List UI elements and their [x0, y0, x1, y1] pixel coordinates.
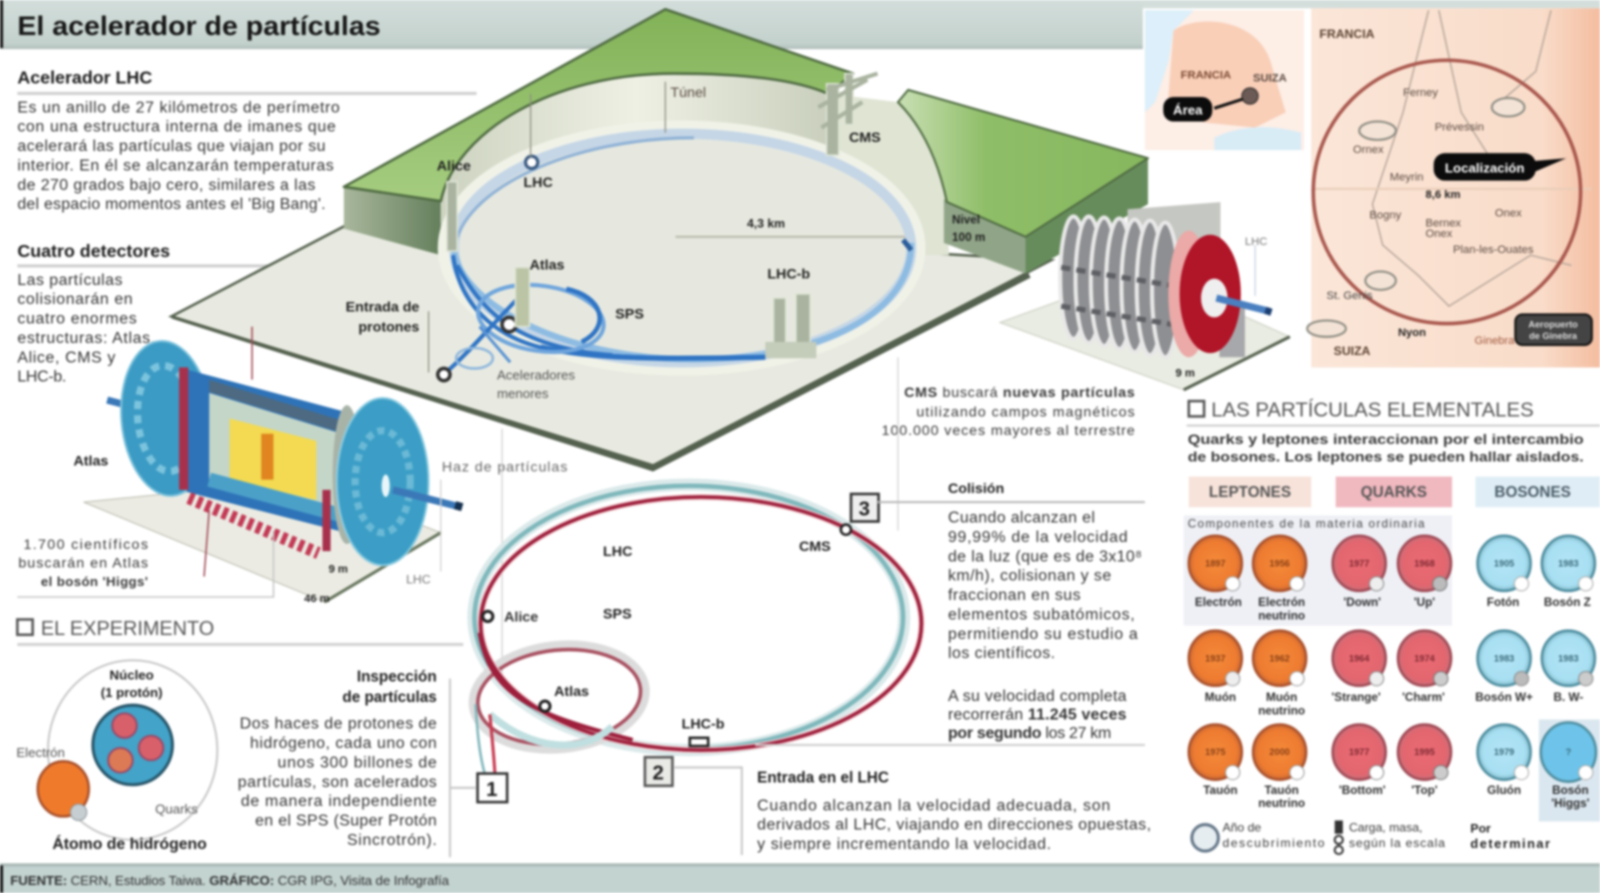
legend: discovery year: descubrimiento	[1222, 836, 1325, 850]
step marker 1	[478, 774, 507, 802]
particle: W+ boson: 1983	[1494, 653, 1514, 663]
Atlas detector labels: buscarán en Atlas	[18, 555, 148, 571]
text: particle inspection: Sincrotrón).	[347, 832, 437, 849]
particle: muon: Muón	[1205, 691, 1236, 704]
text: collision: de la luz (que es de 3x10⁸	[948, 548, 1142, 565]
header band	[0, 0, 1600, 49]
particle: gluon: Gluón	[1487, 784, 1521, 797]
panel: accelerator text	[17, 68, 477, 213]
illustration: CMS detector: 9 m	[1176, 368, 1195, 380]
slab labels: LHC-b	[767, 267, 810, 283]
heading: elementary particles: LAS PARTÍCULAS ELEMENTALES	[1211, 398, 1534, 421]
map: locator area: Ferney	[1403, 87, 1438, 99]
ring: LHC tunnel	[454, 134, 911, 362]
Atlas detector labels: Atlas	[73, 453, 108, 469]
slab labels: Alice	[437, 158, 471, 174]
particle: tau neutrino: Tauón	[1264, 784, 1299, 797]
legend: charge and spin	[1335, 820, 1445, 854]
step marker 2: 2	[652, 763, 664, 785]
particle: W- boson: B. W-	[1554, 691, 1583, 704]
panel: accelerator text: del espacio momentos antes el 'Big Bang'.	[17, 196, 326, 213]
text: collision	[755, 481, 1145, 746]
particle: muon neutrino	[1253, 631, 1306, 717]
text: entry into LHC	[674, 767, 1151, 855]
footer band	[0, 863, 1600, 893]
slab labels: LHC	[523, 175, 553, 191]
diagram: hydrogen atom: Núcleo	[110, 668, 154, 683]
particle: gluon: 1979	[1494, 747, 1514, 757]
text: particle inspection: de partículas	[342, 689, 437, 706]
slab labels: 4,3 km	[747, 217, 785, 231]
collision diagram labels	[504, 539, 831, 733]
text: particles intro	[1188, 432, 1584, 465]
panel: detectors text: Las partículas	[17, 272, 122, 289]
map: locator area: de Ginebra	[1529, 331, 1578, 341]
text: collision: recorrerán 11.245 veces	[948, 706, 1127, 723]
particle: Z boson	[1542, 536, 1595, 609]
category: leptones: LEPTONES	[1209, 484, 1291, 501]
text: CMS note: utilizando campos magnéticos	[916, 404, 1135, 420]
step marker 2	[645, 757, 672, 786]
map: locator area: 8,6 km	[1426, 189, 1460, 201]
panel: detectors text: LHC-b.	[17, 369, 66, 386]
map: Europe inset: FRANCIA	[1181, 70, 1231, 82]
particle: strange: 1964	[1349, 653, 1370, 663]
panel: accelerator text: Es un anillo de 27 kilómetros de perímetro	[17, 99, 340, 116]
text: collision: elementos subatómicos,	[948, 606, 1135, 623]
panel: accelerator text: interior. En él se alcanzarán temperaturas	[17, 157, 334, 174]
text: CMS note	[882, 357, 1135, 531]
text: collision: Cuando alcanzan el	[948, 510, 1095, 527]
particle: photon	[1478, 536, 1531, 609]
panel: detectors text	[17, 241, 507, 386]
panel: accelerator text: con una estructura interna de imanes que	[17, 119, 336, 136]
particle: Higgs boson: ?	[1566, 747, 1572, 757]
particle: gluon	[1478, 725, 1531, 797]
particle: strange	[1332, 631, 1386, 704]
category: quarks	[1336, 477, 1452, 507]
slab labels	[346, 85, 985, 401]
collision diagram labels: LHC	[603, 544, 632, 560]
text: particles intro: de bosones. Los leptones se pueden hallar aislados.	[1188, 449, 1584, 465]
particle: down: 1977	[1349, 558, 1369, 568]
particle: muon	[1189, 631, 1242, 704]
text: collision: los científicos.	[948, 645, 1055, 662]
particle: W+ boson	[1475, 631, 1533, 704]
map: locator area: SUIZA	[1334, 344, 1371, 358]
category: quarks: QUARKS	[1361, 484, 1427, 501]
Atlas detector labels: 1.700 científicos	[23, 537, 148, 553]
collision diagram labels: Alice	[504, 610, 538, 626]
detector shafts	[447, 74, 878, 358]
map: locator area: Onex	[1426, 228, 1453, 240]
particle: down	[1333, 536, 1386, 609]
panel: detectors text: estructuras: Atlas,	[17, 330, 155, 347]
particle: electron neutrino	[1253, 536, 1306, 622]
particle: Higgs boson	[1539, 719, 1600, 822]
map: Europe inset: Área	[1173, 102, 1203, 117]
category: bosones: BOSONES	[1494, 484, 1571, 501]
text: collision: A su velocidad completa	[948, 688, 1127, 705]
slab labels: Atlas	[530, 257, 565, 273]
slab labels: Nivel	[952, 214, 980, 227]
text: particle inspection: Dos haces de protones de	[240, 716, 437, 733]
particle: tau neutrino: 2000	[1269, 747, 1290, 757]
map: locator area: Meyrin	[1390, 172, 1423, 184]
map: locator area	[1307, 8, 1600, 367]
text: entry into LHC: derivados al LHC, viajando en direcciones opuestas,	[757, 817, 1151, 834]
text: particle inspection: de manera independiente	[241, 793, 437, 810]
particle: tau neutrino	[1253, 725, 1306, 810]
particle: up: 'Up'	[1414, 596, 1435, 609]
heading: experiment	[17, 618, 463, 646]
step marker 3: 3	[859, 498, 870, 520]
slab labels: SPS	[615, 306, 644, 322]
particle: top: 1995	[1414, 747, 1435, 757]
particle: up: 1968	[1414, 558, 1435, 568]
text: entry into LHC: Cuando alcanzan la velocidad adecuada, son	[757, 797, 1110, 814]
particle: charm: 'Charm'	[1402, 691, 1445, 704]
step marker 3	[851, 494, 879, 522]
collision diagram labels: Atlas	[554, 684, 589, 700]
collision diagram labels: SPS	[603, 606, 632, 622]
category: bosones	[1476, 477, 1600, 507]
panel: accelerator text: acelerará las partículas que viajan por su	[17, 138, 326, 155]
Atlas detector labels	[17, 429, 567, 674]
collision diagram labels: CMS	[799, 539, 831, 555]
map: locator area: Plan-les-Ouates	[1453, 244, 1534, 256]
particle: Z boson: Bosón Z	[1544, 596, 1591, 609]
text: entry into LHC: Entrada en el LHC	[757, 770, 889, 787]
particle: photon: 1905	[1494, 558, 1514, 568]
collision diagram labels: LHC-b	[682, 717, 725, 733]
diagram: hydrogen atom: Electrón	[16, 745, 65, 760]
map: locator area: Aeropuerto	[1528, 320, 1578, 330]
title: El acelerador de partículas	[17, 11, 381, 41]
slab labels: Entrada de	[346, 299, 419, 315]
particle: charm	[1398, 631, 1451, 704]
diagram: hydrogen atom	[16, 660, 217, 853]
particle: photon: Fotón	[1487, 596, 1519, 609]
note: ordinary matter: Componentes de la materia ordinaria	[1188, 518, 1425, 531]
particle: electron: Electrón	[1195, 596, 1242, 609]
footer band: FUENTE: CERN, Estudios Taiwa. GRÁFICO: CGR IPG, Visita de Infografía	[10, 873, 450, 888]
category: leptones	[1189, 477, 1311, 507]
particle: W- boson: 1983	[1558, 653, 1579, 663]
ordinary matter background	[1184, 515, 1452, 626]
text: collision: km/h), colisionan y se	[948, 568, 1111, 585]
diagram: hydrogen atom: Átomo de hidrógeno	[52, 834, 207, 853]
map: locator area: Localización	[1445, 161, 1524, 176]
map: locator area: Prévessin	[1435, 122, 1484, 134]
Atlas detector labels: el bosón 'Higgs'	[41, 574, 148, 589]
particle: top	[1398, 725, 1451, 797]
underground slab illustration	[171, 9, 1148, 472]
particle: electron neutrino: Electrón	[1258, 596, 1305, 609]
Atlas detector labels: LHC	[406, 573, 431, 587]
particle: strange: 'Strange'	[1332, 691, 1381, 704]
particle: electron	[1189, 536, 1242, 609]
particle: bottom: 1977	[1349, 747, 1369, 757]
map: locator area: Onex	[1495, 207, 1522, 219]
text: particle inspection	[238, 669, 476, 857]
map: locator area: Bernex	[1426, 218, 1461, 230]
text: collision: Colisión	[948, 481, 1004, 497]
panel: detectors text: Alice, CMS y	[17, 349, 115, 366]
particle: down: 'Down'	[1344, 596, 1381, 609]
legend: discovery year: Año de	[1222, 821, 1261, 835]
particle: W+ boson: Bosón W+	[1475, 691, 1533, 704]
heading: experiment: EL EXPERIMENTO	[41, 618, 214, 640]
map: locator area: Nyon	[1398, 327, 1426, 339]
map: locator area: Ginebra	[1474, 335, 1515, 347]
diagram: hydrogen atom: Quarks	[155, 801, 198, 816]
particle: bottom	[1333, 725, 1386, 797]
text: particle inspection: Inspección	[357, 669, 437, 686]
text: collision: permitiendo su estudio a	[948, 626, 1138, 643]
legend: undetermined: Por	[1470, 822, 1491, 836]
text: entry into LHC: y siempre incrementando la velocidad.	[757, 836, 1051, 853]
legend: undetermined	[1470, 822, 1550, 851]
particle: electron neutrino: 1956	[1269, 558, 1290, 568]
panel: accelerator text: Acelerador LHC	[17, 68, 152, 88]
particle: Z boson: 1983	[1558, 558, 1579, 568]
text: collision: 99,99% de la velocidad	[948, 529, 1128, 546]
Atlas detector labels: Haz de partículas	[442, 459, 567, 475]
slab labels: CMS	[849, 130, 881, 146]
legend: charge and spin: Carga, masa,	[1349, 821, 1422, 835]
particle: muon neutrino: Muón	[1266, 691, 1297, 704]
particle: tau: Tauón	[1203, 784, 1238, 797]
text: collision: fraccionan en sus	[948, 587, 1081, 604]
map: locator area: FRANCIA	[1319, 27, 1375, 41]
particle: top: 'Top'	[1411, 784, 1438, 797]
illustration: Atlas detector	[84, 327, 462, 602]
panel: detectors text: colisionarán en	[17, 291, 133, 308]
particle: Higgs boson: 'Higgs'	[1551, 797, 1590, 810]
particle: tau	[1189, 725, 1242, 797]
heading: elementary particles	[1187, 398, 1600, 427]
slab labels: protones	[358, 320, 419, 336]
slab labels: menores	[497, 386, 549, 401]
text: CMS note: 100.000 veces mayores al terrestre	[882, 423, 1135, 439]
panel: detectors text: Cuatro detectores	[17, 241, 170, 261]
map: locator area: St. Genis	[1327, 290, 1373, 302]
legend: undetermined: determinar	[1470, 836, 1550, 851]
particle: Higgs boson: Bosón	[1552, 784, 1589, 797]
diagram: collision rings	[469, 485, 921, 774]
text: CMS note: CMS buscará nuevas partículas	[904, 385, 1135, 401]
map: Europe inset: SUIZA	[1253, 73, 1287, 85]
diagram: hydrogen atom: (1 protón)	[101, 685, 163, 700]
text: collision: por segundo los 27 km	[948, 725, 1111, 742]
Atlas detector labels: 9 m	[329, 564, 348, 576]
map: locator area: Ornex	[1353, 144, 1384, 156]
particle: muon neutrino: 1962	[1269, 653, 1290, 663]
illustration: CMS detector	[1000, 202, 1290, 390]
slab labels: Aceleradores	[497, 368, 575, 383]
particle: tau: 1975	[1205, 747, 1226, 757]
panel: detectors text: cuatro enormes	[17, 311, 137, 328]
text: particle inspection: hidrógeno, cada uno con	[250, 735, 437, 752]
particle: charm: 1974	[1414, 653, 1436, 663]
slab labels: 100 m	[952, 231, 985, 244]
particle: electron: 1897	[1205, 558, 1226, 568]
particle: tau neutrino: neutrino	[1258, 797, 1305, 810]
legend: charge and spin: según la escala	[1349, 836, 1445, 850]
particle: electron neutrino: neutrino	[1258, 609, 1305, 622]
text: particle inspection: partículas, son acelerados	[238, 774, 437, 791]
map: Europe inset	[1145, 10, 1304, 150]
SPS and smaller accelerators	[429, 82, 765, 381]
panel: accelerator text: de 270 grados bajo cero, similares a las	[17, 177, 315, 194]
particle: muon: 1937	[1205, 653, 1226, 663]
text: particles intro: Quarks y leptones interaccionan por el intercambio	[1188, 432, 1584, 448]
step marker 1: 1	[486, 779, 498, 801]
particle: bottom: 'Bottom'	[1339, 784, 1386, 797]
axis line 4,3 km	[676, 236, 908, 238]
map: locator area: Bogny	[1369, 209, 1402, 221]
legend: discovery year	[1192, 821, 1325, 851]
particle: W- boson	[1542, 631, 1595, 704]
particle: muon neutrino: neutrino	[1258, 704, 1305, 717]
text: particle inspection: en el SPS (Super Protón	[255, 813, 437, 830]
text: particle inspection: unos 300 billones de	[278, 754, 437, 771]
Atlas detector labels: 46 m	[304, 593, 330, 605]
slab labels: Túnel	[670, 85, 706, 101]
illustration: CMS detector: LHC	[1245, 236, 1267, 248]
particle: up	[1398, 536, 1451, 609]
